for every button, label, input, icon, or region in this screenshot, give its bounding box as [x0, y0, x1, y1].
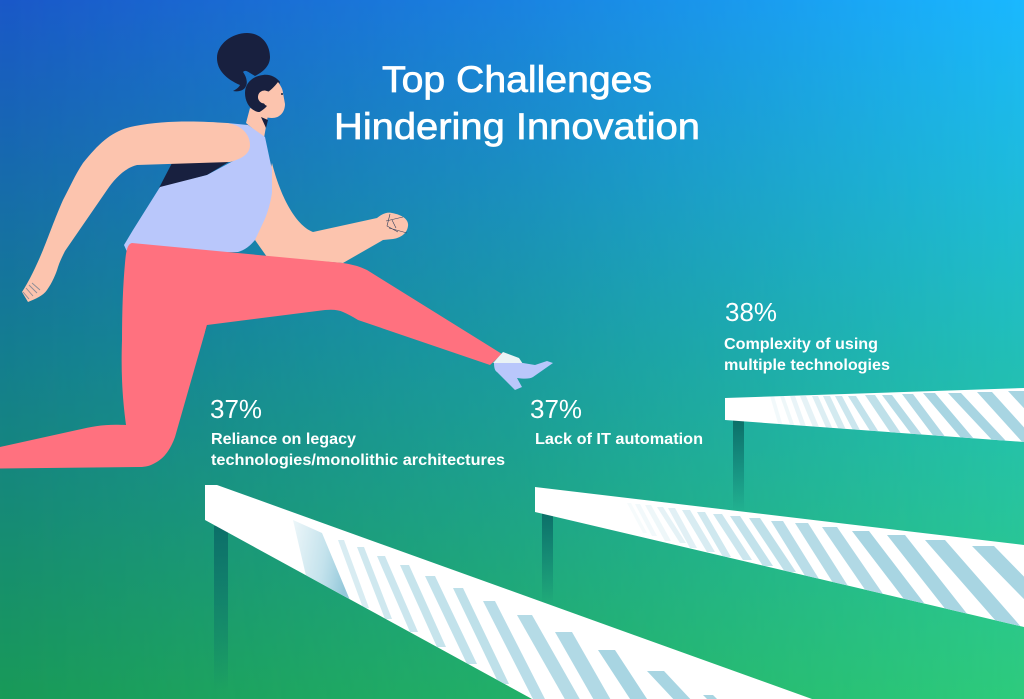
- head hair: [245, 75, 280, 112]
- collar: [261, 117, 268, 128]
- post: [542, 512, 553, 604]
- neck: [246, 108, 268, 138]
- front arm: [255, 163, 408, 263]
- face: [258, 82, 285, 118]
- stat: 38% complexity: multiple technologies: [724, 357, 890, 374]
- stat: 38% complexity: 38%: [725, 297, 777, 327]
- title: Top Challenges: [382, 59, 652, 100]
- bar: [725, 388, 1024, 442]
- stat: 37% legacy: [210, 394, 505, 469]
- bar: [205, 485, 812, 699]
- stat: 37% legacy: 37%: [210, 394, 262, 424]
- hair bun: [217, 33, 270, 91]
- sock: [493, 352, 523, 364]
- ear: [258, 90, 272, 106]
- bar: [535, 487, 1024, 627]
- stat: 37% automation: [530, 394, 703, 448]
- stripes: [770, 391, 1024, 447]
- post: [214, 526, 228, 691]
- stat: 37% legacy: technologies/monolithic architectures: [211, 452, 505, 469]
- stat: 37% automation: Lack of IT automation: [535, 431, 703, 448]
- hurdle 3: [725, 388, 1024, 512]
- stripes: [627, 503, 1024, 638]
- hurdle 1: [205, 485, 812, 699]
- hurdle 2: [535, 487, 1024, 638]
- finger lines: [23, 283, 40, 299]
- shadow under hip: [177, 322, 208, 332]
- stat: 37% automation: 37%: [530, 394, 582, 424]
- back arm: [22, 121, 250, 302]
- post: [733, 420, 744, 512]
- stat: 38% complexity: [724, 297, 890, 374]
- shoe: [494, 361, 553, 390]
- stripes: [293, 520, 719, 699]
- title: [334, 59, 700, 147]
- stat: 37% legacy: Reliance on legacy: [211, 431, 356, 448]
- title: Hindering Innovation: [334, 106, 700, 147]
- eye: [281, 93, 283, 95]
- fist lines: [386, 214, 407, 233]
- stat: 38% complexity: Complexity of using: [724, 336, 878, 353]
- dark top: [159, 160, 232, 188]
- pants: [0, 243, 502, 468]
- runner figure: [0, 33, 553, 468]
- shirt: [124, 123, 272, 254]
